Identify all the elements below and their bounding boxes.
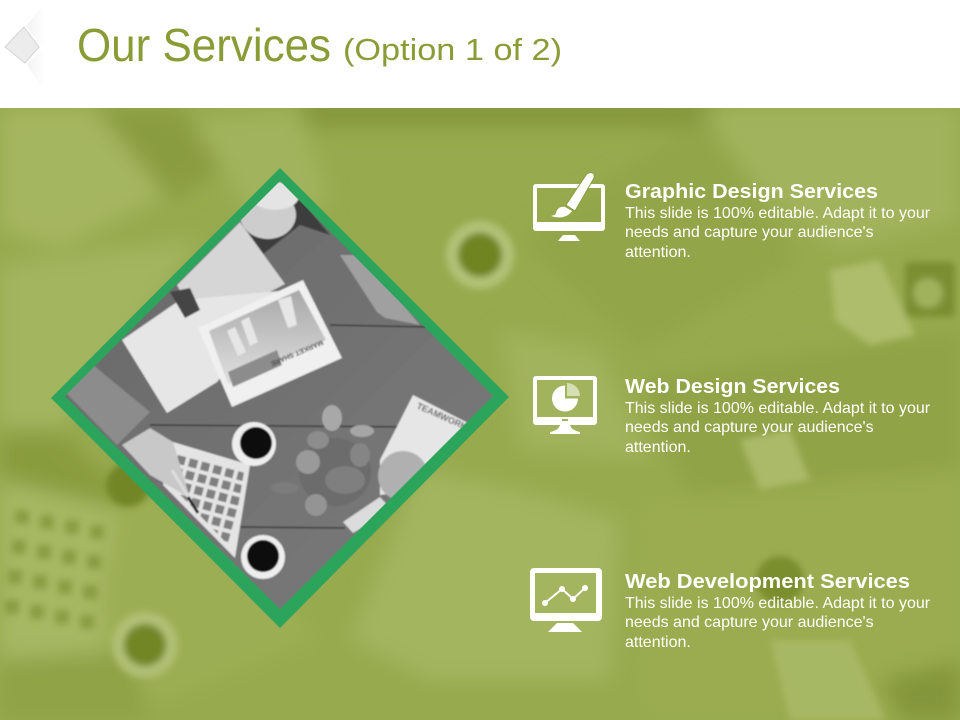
service: web design: [533, 376, 931, 456]
teamwork brochure: [343, 395, 470, 533]
body text: This slide is 100% editable. Adapt it to your: [625, 595, 931, 612]
icon: monitor with line chart: [530, 568, 602, 632]
body text: This slide is 100% editable. Adapt it to your: [625, 400, 931, 417]
teamwork brochure: TEAMWORK: [415, 401, 469, 432]
coffee cups: [232, 422, 285, 579]
notebook: [176, 222, 286, 300]
service: graphic design: [533, 173, 931, 261]
title: [77, 19, 562, 71]
person left: sleeve and hand: [65, 365, 150, 445]
heading: Web Design Services: [625, 376, 840, 398]
body text: needs and capture your audience's: [625, 419, 874, 436]
plank lines: [330, 325, 430, 327]
dark table top corner: [247, 200, 330, 254]
person top: cup and sleeve: [240, 204, 298, 240]
body text: attention.: [625, 439, 691, 456]
person right: arm: [340, 255, 420, 325]
body text: This slide is 100% editable. Adapt it to your: [625, 205, 931, 222]
heading: Graphic Design Services: [625, 181, 878, 203]
icon: monitor with paintbrush: [533, 173, 605, 241]
body text: attention.: [625, 634, 691, 651]
icon: header diamond ornament: [5, 8, 46, 86]
tablet: MARKET SHARE: [269, 338, 324, 367]
heading: Web Development Services: [625, 571, 910, 593]
tablet: [198, 280, 342, 407]
diamond photo: desk scene in greyscale: [65, 181, 493, 609]
body text: attention.: [625, 244, 691, 261]
body text: needs and capture your audience's: [625, 614, 874, 631]
title: Our Services: [77, 19, 331, 71]
plant: [271, 405, 374, 516]
service: web development: [530, 568, 931, 651]
diamond frame: [51, 168, 509, 628]
colour swatch card: [122, 428, 250, 558]
body text: needs and capture your audience's: [625, 224, 874, 241]
header band: [0, 0, 960, 108]
icon: monitor with pie chart: [533, 376, 597, 434]
title: (Option 1 of 2): [343, 32, 562, 67]
